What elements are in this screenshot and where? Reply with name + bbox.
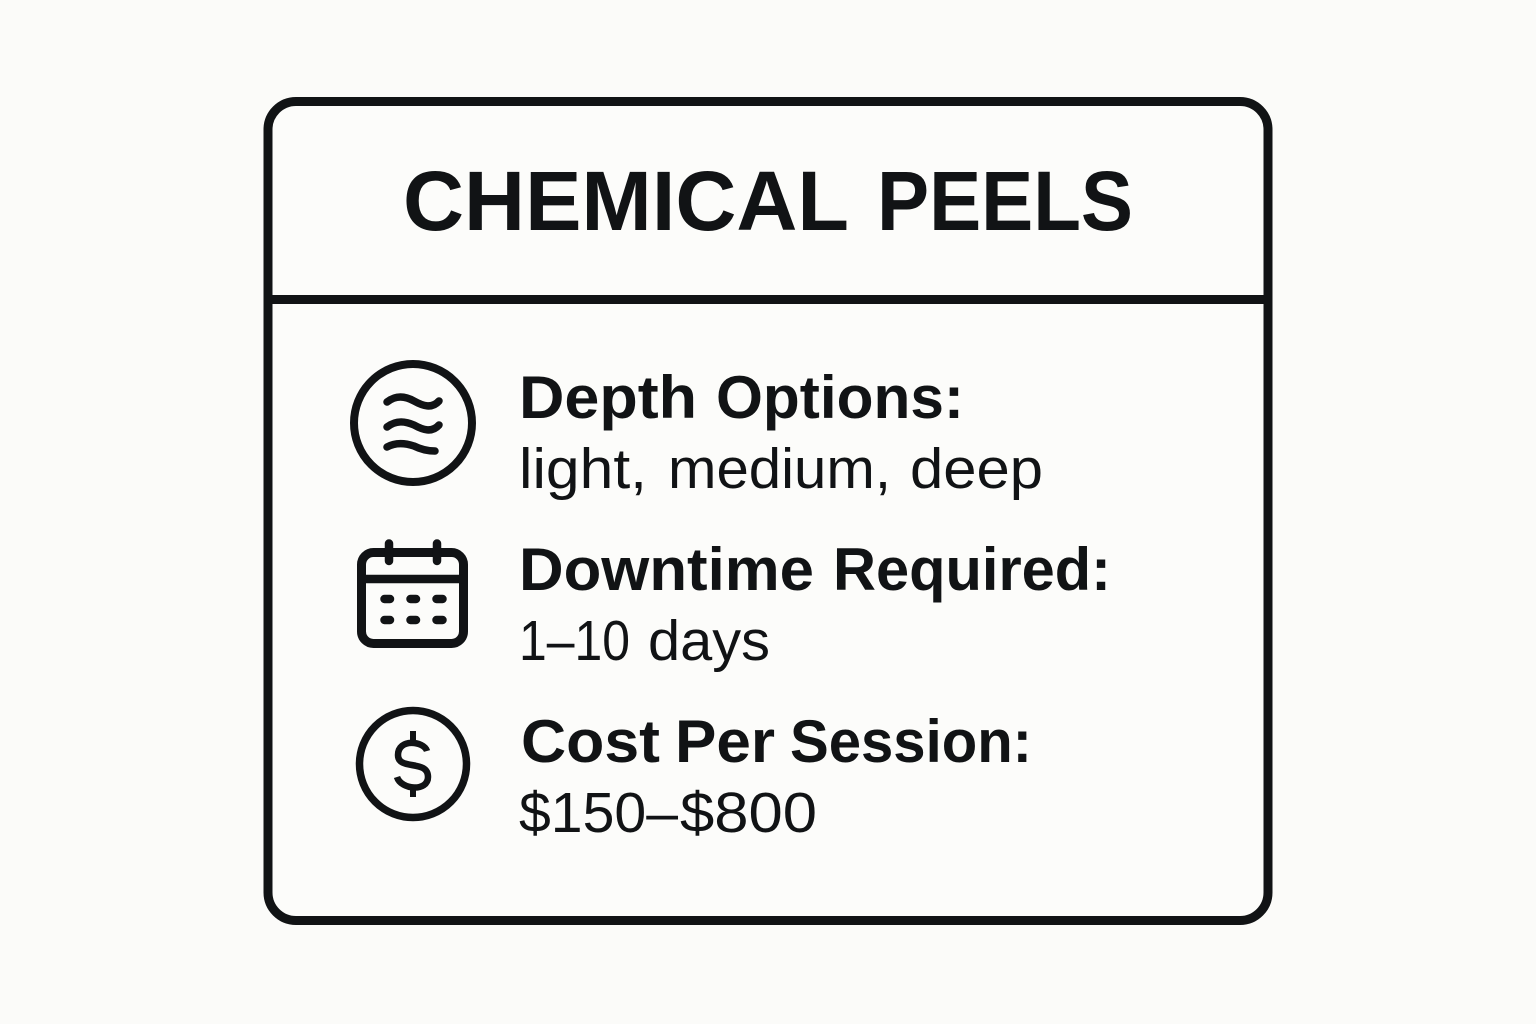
text: cost per session: Per — [675, 708, 775, 775]
text: depth options: deep — [910, 437, 1043, 501]
text: cost per session: Cost — [521, 708, 660, 775]
text: cost per session: $150– — [519, 781, 678, 845]
text: downtime required: Downtime — [519, 536, 814, 603]
text: depth options: Depth — [519, 364, 697, 431]
text: downtime required: days — [648, 609, 770, 673]
title — [403, 154, 1133, 248]
text: downtime required — [519, 536, 1111, 673]
text: cost per session: Session: — [790, 708, 1032, 775]
text: depth options: light, — [519, 437, 647, 501]
title: PEELS — [877, 154, 1133, 248]
text: downtime required: 1–10 — [519, 609, 630, 673]
text: depth options: Options: — [716, 364, 964, 431]
text: downtime required: Required: — [833, 536, 1111, 603]
icon: waves — [354, 364, 472, 482]
icon: calendar — [362, 544, 464, 644]
text: depth options: medium, — [668, 437, 891, 501]
icon: dollar — [360, 710, 466, 818]
panel: card — [268, 102, 1268, 920]
text: depth options — [519, 364, 1043, 501]
title: CHEMICAL — [403, 154, 849, 248]
text: cost per session: $800 — [680, 781, 817, 845]
text: cost per session — [519, 708, 1032, 845]
